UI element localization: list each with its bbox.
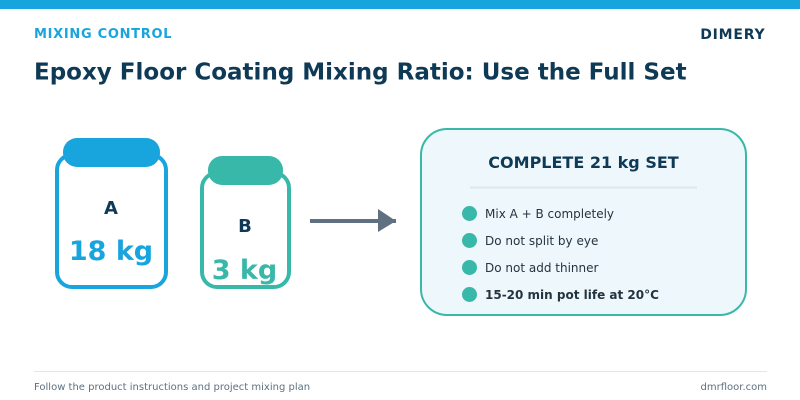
footer website: dmrfloor.com xyxy=(701,382,767,393)
bucket B weight: 3 kg xyxy=(212,255,277,286)
arrow xyxy=(310,209,396,232)
brand name: DIMERY xyxy=(700,27,766,43)
bucket B letter: B xyxy=(238,216,252,237)
list item 1: Mix A + B completely xyxy=(485,207,614,221)
bucket A xyxy=(57,138,166,287)
panel heading: COMPLETE 21 kg SET xyxy=(488,153,679,172)
bucket A lid xyxy=(63,138,160,167)
title: Epoxy Floor Coating Mixing Ratio: Use the Full Set xyxy=(34,60,687,86)
bucket B lid xyxy=(208,156,283,185)
panel: complete set xyxy=(421,129,746,315)
list item 2: Do not split by eye xyxy=(485,234,598,248)
bucket B body xyxy=(202,173,289,287)
top accent bar xyxy=(0,0,800,9)
panel background xyxy=(421,129,746,315)
bucket A body xyxy=(57,155,166,287)
list item 4: 15-20 min pot life at 20°C xyxy=(485,288,659,302)
bucket A letter: A xyxy=(104,198,118,219)
bucket B xyxy=(202,156,289,287)
eyebrow label: MIXING CONTROL xyxy=(34,27,172,42)
footer note: Follow the product instructions and project mixing plan xyxy=(34,382,310,393)
list item 3: Do not add thinner xyxy=(485,261,599,275)
bucket A weight: 18 kg xyxy=(69,236,153,267)
